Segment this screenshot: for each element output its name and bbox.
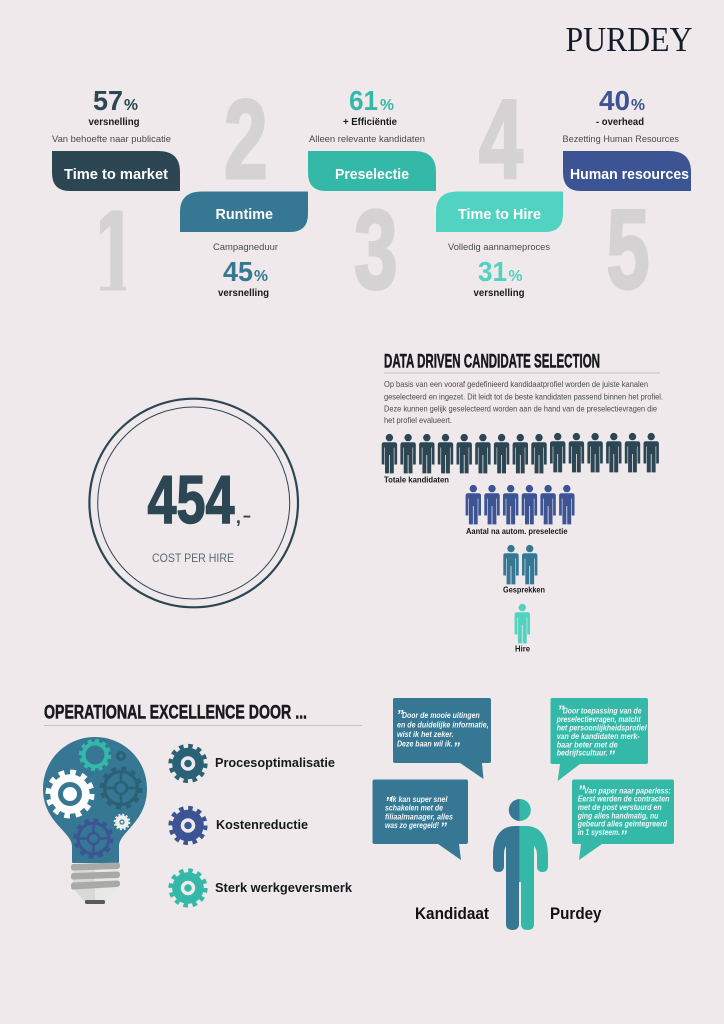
heading: OPERATIONAL EXCELLENCE DOOR ... [44, 702, 307, 724]
panel: human resources [562, 85, 691, 191]
stat label: versnelling [474, 288, 524, 299]
panel: time to market [52, 85, 180, 191]
step number 4: 4 [479, 77, 523, 202]
cost value: 454 [148, 462, 235, 538]
gear: dark [102, 769, 140, 807]
stat: 31 percent: % [508, 268, 522, 285]
speech bubble: candidate top: Deze baan wil ik. [397, 740, 453, 749]
speech bubble: purdey bottom: ” [620, 827, 627, 843]
step number 5: 5 [606, 187, 650, 312]
stat label: versnelling [88, 117, 140, 128]
panel: time to hire [436, 192, 563, 299]
speech bubble: purdey top [550, 698, 648, 781]
pictogram row: totale kandidaten [382, 433, 659, 473]
stat label: versnelling [218, 288, 269, 299]
speech bubble: candidate top: en de duidelijke informatie, [397, 721, 489, 730]
intro text: Op basis van een vooraf gedefinieerd kandidaatprofiel worden de juiste kanalen [384, 379, 648, 389]
inner ring [98, 407, 290, 599]
gear: white [48, 772, 92, 816]
speech bubble: purdey bottom: ging alles handmatig, nu [577, 811, 658, 820]
speech bubble: candidate bottom: filiaalmanager, alles [385, 812, 453, 821]
panel: testimonials [372, 698, 674, 930]
gear: blue [75, 820, 112, 857]
step timeline [52, 90, 691, 298]
description: Campagneduur [213, 242, 278, 253]
tab shape [180, 192, 308, 232]
step number 1: 1 [89, 182, 140, 328]
speech bubble: purdey bottom: gebeurd alles geïntegreerd [577, 820, 668, 829]
speech bubble: candidate bottom: schakelen met de [385, 804, 443, 813]
tab shape [52, 151, 180, 191]
tab label: Time to market [64, 166, 168, 183]
speech bubble: purdey top: het persoonlijkheidsprofiel [557, 723, 647, 732]
outer ring [89, 399, 298, 607]
speech bubble: candidate bottom: was zo geregeld! [385, 821, 439, 830]
stat: 57 percent: 57 [93, 85, 123, 116]
tab shape [308, 151, 436, 191]
speech bubble: candidate bottom: Ik kan super snel [391, 795, 448, 804]
speech bubble: purdey top: ” [608, 747, 615, 763]
speech bubble: purdey top: van de kandidaten merk- [557, 732, 640, 741]
stat: 57 percent [93, 85, 138, 116]
stat: 61 percent [349, 85, 394, 116]
label: hire: Hire [515, 644, 531, 654]
speech bubble: candidate top: wist ik het zeker. [397, 730, 454, 739]
tab label: Preselectie [335, 166, 409, 183]
speech bubble: candidate top: ” [396, 706, 404, 722]
icon: light bulb with gears [43, 737, 147, 904]
stat: 61 percent: % [380, 97, 394, 114]
tab shape [563, 151, 691, 191]
step number 3: 3 [354, 187, 398, 312]
stat label: - overhead [596, 117, 644, 128]
pictogram: hire [515, 604, 530, 643]
stat: 31 percent: 31 [478, 256, 507, 287]
pictogram row: gesprekken [503, 545, 537, 584]
panel: runtime [180, 192, 308, 299]
panel: operational excellence [43, 702, 362, 906]
description: Alleen relevante kandidaten [309, 134, 425, 145]
stat: 45 percent: 45 [223, 256, 253, 287]
tab label: Human resources [570, 166, 689, 183]
speech bubble: candidate top [393, 698, 491, 779]
speech bubble: purdey top: ” [558, 702, 564, 718]
intro text: het profiel evalueert. [384, 415, 452, 425]
tab label: Runtime [216, 206, 273, 223]
speech bubble: candidate top: ” [453, 739, 460, 755]
speech bubble: candidate bottom: ” [440, 819, 447, 835]
panel: data driven candidate selection [382, 350, 663, 654]
panel: cost per hire [89, 399, 298, 607]
speech bubble: purdey bottom [572, 780, 674, 860]
description: Bezetting Human Resources [562, 134, 679, 145]
logo: Purdey: PURDEY [566, 20, 692, 59]
label: kandidaat: Kandidaat [415, 905, 489, 923]
stat: 40 percent: % [631, 97, 645, 114]
item: procesoptimalisatie: Procesoptimalisatie [215, 755, 335, 770]
tab label: Time to Hire [458, 206, 541, 223]
stat: 40 percent: 40 [599, 85, 630, 116]
item: kostenreductie: Kostenreductie [216, 817, 308, 832]
comma and dash: ,- [234, 502, 252, 529]
label: totale kandidaten: Totale kandidaten [384, 476, 449, 484]
stat: 57 percent: % [124, 97, 138, 114]
icon: split figure [493, 799, 548, 930]
panel: preselectie [308, 85, 436, 191]
stat: 45 percent: % [254, 268, 268, 285]
item: kostenreductie [170, 808, 308, 843]
label: purdey: Purdey [550, 905, 602, 923]
stat: 61 percent: 61 [349, 85, 378, 116]
speech bubble: purdey top: bedrijfscultuur. [557, 749, 608, 758]
item: procesoptimalisatie [170, 746, 335, 781]
speech bubble: purdey top: Door toepassing van de [563, 706, 642, 715]
stat label: + Efficiëntie [343, 117, 397, 128]
speech bubble: purdey bottom: in 1 systeem. [578, 828, 620, 837]
pictogram row: na preselectie [466, 485, 574, 524]
speech bubble: candidate bottom: ” [385, 794, 392, 810]
intro text [384, 379, 663, 425]
speech bubble: purdey bottom: Eerst werden de contracten [578, 795, 669, 804]
speech bubble: purdey top: baar beter met de [557, 740, 618, 749]
speech bubble: purdey bottom: Van paper naar paperless: [584, 786, 671, 795]
gear: small dark [118, 752, 124, 760]
step number 2: 2 [224, 77, 268, 202]
speech bubble: purdey bottom: met de post verstuurd en [578, 803, 662, 812]
label: gesprekken: Gesprekken [503, 586, 545, 594]
description: Volledig aannameproces [448, 242, 550, 253]
speech bubble: purdey top: preselectievragen, matcht [556, 715, 641, 724]
stat: 45 percent [223, 256, 268, 287]
item: sterk werkgeversmerk: Sterk werkgeversmerk [215, 880, 353, 895]
stat: 40 percent [599, 85, 645, 116]
speech bubble: purdey bottom: ” [578, 782, 585, 798]
caption: COST PER HIRE [152, 551, 234, 565]
gear: small white [115, 815, 129, 829]
speech bubble: candidate top: Door de mooie uitingen [402, 711, 480, 720]
tab shape [436, 192, 563, 232]
speech bubble: candidate bottom [372, 780, 468, 860]
gear: teal [80, 740, 110, 770]
description: Van behoefte naar publicatie [52, 134, 171, 145]
item: sterk werkgeversmerk [170, 870, 353, 906]
intro text: Deze kunnen gelijk geselecteerd worden aan de hand van de preselectievragen die [384, 403, 657, 413]
label: aantal na autom. preselectie: Aantal na autom. preselectie [466, 527, 568, 536]
intro text: geselecteerd en ingezet. Dit leidt tot de beste kandidaten passend binnen het profiel. [384, 391, 663, 401]
